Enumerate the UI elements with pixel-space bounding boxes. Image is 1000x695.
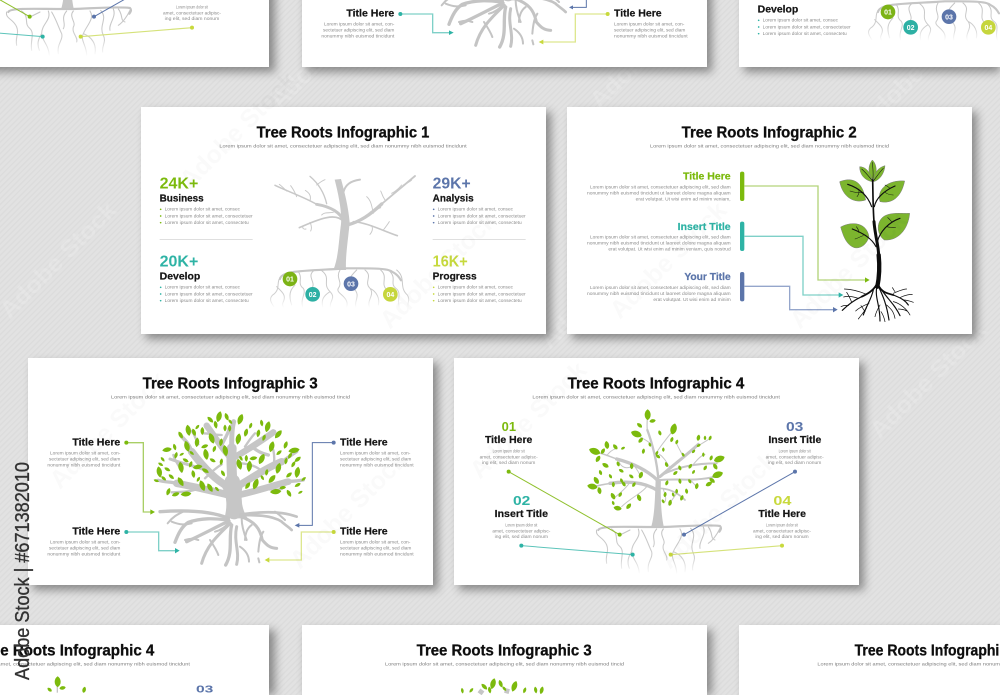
text: top-left block: Title Here [72,437,121,448]
text block 04: Title Here [758,509,806,520]
block: Insert Title: erat volutpat. Ut wisi enim ad minim veniam, quis nostrud [608,247,731,252]
stat: 16K+ Progress: 16K+ [433,253,468,270]
subtitle: Lorem ipsum dolor sit amet, consectetuer adipiscing elit, sed diam nonum [817,662,1000,667]
text: bottom-right block: nonummy nibh euismod tincidunt [340,552,415,557]
stat: 29K+ Analysis: Lorem ipsum dolor sit amet, consec [438,207,513,212]
number badges: 02 [309,292,317,299]
background watermarks: Adobe Stock [534,226,662,354]
text: bottom-left block: nonummy nibh euismod tincidunt [47,552,121,557]
stat: 20K+ Develop: Develop [160,271,200,282]
stat: 20K+ Develop: Lorem ipsum dolor sit amet, consec [165,285,240,290]
number badges: 01 [286,277,294,284]
text block 02: amet, consectetuer adipisc- [492,528,551,533]
card watermarks: Adobe Stock [464,356,592,484]
leader line 04 [669,544,784,557]
text block 03: Lorem ipsum dolor sit [779,448,811,453]
panel: Tree Roots Infographic 3 [28,358,433,585]
card watermarks [44,66,912,574]
card watermarks: Adobe Stock [654,446,782,574]
card watermarks: Adobe Stock [174,66,302,194]
block: Title Here: nonummy nibh euismod tincidunt ut laoreet dolore magna aliquam [587,191,731,196]
text block 04: amet, consectetuer adipisc- [753,528,812,533]
arrow: teal connector [124,530,180,553]
text: top-left block: sectetuer adipiscing elit, sed diam [49,456,121,461]
background watermarks [0,0,992,444]
text: top-right block: Title Here [340,437,388,448]
leader lines and text [0,0,222,39]
text block 03: 03 [786,419,803,434]
text: bottom-right block [340,526,415,557]
stat: 16K+ Progress: Lorem ipsum dolor sit amet, consectetu [438,298,522,303]
card watermarks: Adobe Stock [284,446,412,574]
background watermarks: Adobe Stock [864,316,992,444]
block: Title Here: erat volutpat. Ut wisi enim ad minim veniam, [636,197,731,202]
stat: 20K+ Develop: Lorem ipsum dolor sit amet, consectetu [165,298,249,303]
panel: Tree Roots Infographic 4 [454,358,859,585]
stat: 24K+ Business: Lorem ipsum dolor sit amet, consectetu [165,220,249,225]
panel: bottom-middle partial card (Infographic 3 top) [302,625,707,695]
text block 03: amet, consectetuer adipisc- [766,454,824,459]
icon: leafy tree with roots [587,409,726,573]
panel: Tree Roots Infographic 2 [567,107,972,334]
stat: 16K+ Progress: Lorem ipsum dolor sit amet, consec [438,285,513,290]
text block 04: Lorem ipsum dolor sit [766,522,799,527]
title: Tree Roots Infographic 2 [682,125,857,142]
arrow: green connector [124,441,155,515]
connectors and text: Lorem ipsum dolor sit amet, con- [324,22,395,27]
tree top leaves [47,676,87,693]
block: Title Here [587,172,744,202]
text: top-left block: nonummy nibh euismod tincidunt [47,462,121,467]
text: top-left block: Lorem ipsum dolor sit amet, con- [50,450,121,455]
text block 01: ing elit, sed diam nonum [482,460,536,465]
block: Insert Title: Insert Title [678,222,731,233]
leader line 02 [519,544,635,557]
stat: 24K+ Business: Lorem ipsum dolor sit amet, consectetuer [165,213,253,218]
Develop text block: Lorem ipsum dolor sit amet, consectetuer [763,24,851,29]
text block 02: Lorem ipsum dolor sit [505,522,538,527]
subtitle: Lorem ipsum dolor sit amet, consectetuer adipiscing elit, sed diam nonummy nibh euismod tincidunt [532,395,781,400]
Develop text block: Lorem ipsum dolor sit amet, consectetu [763,31,847,36]
text block 01: 01 [502,419,517,434]
stat: 24K+ Business: Business [160,193,204,204]
text: bottom-left block [47,526,121,557]
Develop text block: Develop [758,4,798,15]
block: Your Title [587,272,744,302]
block: Title Here: Title Here [683,172,731,183]
stat: 24K+ Business: 24K+ [160,175,198,192]
arrow: green connector [744,186,870,283]
text block 02 [492,493,551,539]
connectors and text: nonummy nibh euismod tincidunt [614,34,689,39]
text: bottom-left block: Lorem ipsum dolor sit amet, con- [50,540,121,545]
text block 01: amet, consectetuer adipisc- [480,454,538,459]
text: top-right block [340,437,415,467]
text block 02: Insert Title [495,509,548,520]
text: top-left block [47,437,121,467]
block: Your Title: erat volutpat. Ut wisi enim ad minim [653,297,731,302]
panel: top-right partial card (Infographic 1 bottom) [739,0,1000,67]
leader line 03 [682,470,797,537]
Develop text block: Lorem ipsum dolor sit amet, consec [763,18,838,23]
block: Your Title: Your Title [684,272,731,283]
connectors and text: Title Here [346,8,395,19]
icon: tree with leaves and roots [153,411,307,565]
stat: 29K+ Analysis: Lorem ipsum dolor sit amet, consectetu [438,220,522,225]
tree roots art with number badges: 04 [984,25,992,32]
panel: bottom-right partial card (Infographic 1 top) [739,625,1000,695]
tree art [427,0,581,47]
text: top-right block: sectetuer adipiscing elit, sed diam [340,456,412,461]
leader line 01 [507,470,622,537]
text block 02: ing elit, sed diam nonum [495,534,549,539]
connectors and text: sectetuer adipiscing elit, sed diam [614,28,686,33]
stat: 16K+ Progress: Lorem ipsum dolor sit amet, consectetuer [438,291,526,296]
stat: 20K+ Develop: Lorem ipsum dolor sit amet, consectetuer [165,291,253,296]
text: top-right block: nonummy nibh euismod tincidunt [340,462,415,467]
stat: 16K+ Progress: Progress [433,271,477,282]
connectors and text: nonummy nibh euismod tincidunt [321,34,395,39]
block: Insert Title: Lorem ipsum dolor sit amet, consectetuer adipiscing elit, sed diam [590,235,731,240]
text: bottom-right block: Lorem ipsum dolor sit amet, con- [340,540,411,545]
Adobe Stock side credit: Adobe Stock | #671382010 [12,462,34,680]
number badges: 04 [386,292,394,299]
subtitle: Lorem ipsum dolor sit amet, consectetuer adipiscing elit, sed diam nonummy nibh euismod tincid [650,144,889,149]
number badges: 03 [347,281,355,288]
leader lines and text: Lorem ipsum dolor sit [176,4,209,9]
stat: 24K+ Business [160,175,253,225]
panel: bottom-left partial card (Infographic 4 top) [0,625,269,695]
card watermarks: Adobe Stock [604,196,732,324]
block: Insert Title [587,222,744,252]
Develop text block [758,4,851,36]
text: bottom-right block: Title Here [340,526,388,537]
subtitle: Lorem ipsum dolor sit amet, consectetuer adipiscing elit, sed diam nonummy nibh euismod tincid [385,662,624,667]
title: Tree Roots Infographic 1 [257,125,430,142]
icon: green plant with black roots [840,160,913,322]
text block 04: ing elit, sed diam nonum [755,534,809,539]
arrow: teal connector [744,236,843,298]
panel: top-middle partial card (Infographic 3 bottom) [302,0,707,67]
card watermarks: Adobe Stock [374,206,502,334]
stat: 16K+ Progress [433,253,526,303]
stat: 29K+ Analysis: 29K+ [433,175,471,192]
text: bottom-left block: sectetuer adipiscing elit, sed diam [49,546,121,551]
text block 04 [753,493,812,539]
text block 01 [480,419,538,465]
block: Title Here: Lorem ipsum dolor sit amet, consectetuer adipiscing elit, sed diam [590,185,731,190]
leader lines and text: amet, consectetuer adipisc- [163,10,222,15]
text block 02: 02 [513,493,530,508]
text block 03: Insert Title [768,435,822,446]
tree roots art with number badges: 02 [907,25,915,32]
title: Tree Roots Infographic 3 [417,643,592,660]
block: Your Title: Lorem ipsum dolor sit amet, consectetuer adipiscing elit, sed diam [590,285,731,290]
panel: Tree Roots Infographic 1 [141,107,546,334]
stat: 29K+ Analysis: Analysis [433,193,474,204]
stat: 29K+ Analysis: Lorem ipsum dolor sit amet, consectetuer [438,213,526,218]
card watermarks: Adobe Stock [44,366,172,494]
number badges [283,272,398,302]
text: bottom-left block: Title Here [72,526,121,537]
connectors and text: Lorem ipsum dolor sit amet, con- [614,22,685,27]
connectors and text: sectetuer adipiscing elit, sed diam [323,28,395,33]
stat: 20K+ Develop [160,253,253,303]
tree roots art with number badges: 01 [884,10,892,17]
subtitle: Lorem ipsum dolor sit amet, consectetuer adipiscing elit, sed diam nonummy nibh euismod tincid [111,395,350,400]
title: Tree Roots Infographic 4 [568,376,745,393]
tree top crown [461,678,544,695]
panel: top-left partial card (Infographic 4 bottom) [0,0,269,67]
connectors and text: Title Here [614,8,662,19]
text block 03: ing elit, sed diam nonum [768,460,822,465]
stat: 20K+ Develop: 20K+ [160,253,198,270]
text: top-right block: Lorem ipsum dolor sit amet, con- [340,450,411,455]
block: Insert Title: nonummy nibh euismod tincidunt ut laoreet dolore magna aliquam [587,241,731,246]
text block 03 [766,419,824,465]
tree roots art with number badges: 03 [945,14,953,21]
card watermarks: Adobe Stock [784,206,912,334]
text block 01: Lorem ipsum dolor sit [493,448,525,453]
arrow: blue connector [744,286,838,312]
subtitle: Lorem ipsum dolor sit amet, consectetuer adipiscing elit, sed diam nonummy nibh euismod tincidunt [219,144,468,149]
icon: bare tree with roots [271,176,415,308]
arrow: lime connector [265,530,336,563]
text block 01: Title Here [485,435,533,446]
text: bottom-right block: sectetuer adipiscing elit, sed diam [340,546,412,551]
stat: 29K+ Analysis [433,175,526,225]
leader lines and text: ing elit, sed diam nonum [165,16,220,21]
tree roots art with number badges [869,1,999,41]
title: Tree Roots Infographic 3 [143,376,318,393]
stat: 24K+ Business: Lorem ipsum dolor sit amet, consec [165,207,240,212]
block: Your Title: nonummy nibh euismod tincidunt ut laoreet dolore magna aliquam [587,291,731,296]
connectors and text [321,0,689,44]
tree roots art [0,0,136,55]
background watermarks: Adobe Stock [854,6,982,134]
text block 04: 04 [773,493,792,508]
arrow: blue connector [295,441,336,528]
